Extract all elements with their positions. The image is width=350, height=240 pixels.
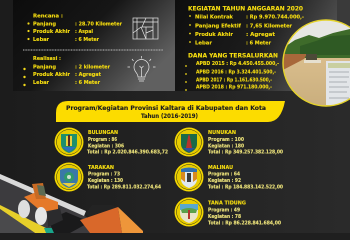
rencana text: : Aspal: [75, 29, 93, 35]
photo: road construction site: [280, 18, 350, 110]
rencana text: Panjang: [33, 22, 56, 28]
heading: kegiatan: KEGIATAN TAHUN ANGGARAN 2020: [188, 6, 303, 12]
logo: tana tidung: [174, 198, 204, 226]
dana details: APBD 2016 : Rp 3.324.401.500,-: [196, 70, 276, 76]
panel: kegiatan tahun anggaran 2020: [175, 0, 337, 91]
kegiatan details: : 6 Meter: [246, 40, 271, 46]
dana details: [185, 61, 279, 91]
road roller: [18, 183, 63, 227]
district: tana tidung: [174, 198, 281, 226]
dana details: APBD 2015 : Rp 4.450.455.000,-: [196, 61, 279, 67]
title banner: [56, 101, 285, 122]
kegiatan details: Nilai Kontrak: [195, 14, 233, 20]
kegiatan details: : Rp 9.970.744.000,-: [246, 14, 305, 20]
kegiatan details: Produk Akhir: [195, 32, 233, 38]
realisasi text: [23, 56, 110, 86]
realisasi text: : 6 Meter: [75, 80, 100, 86]
district: malinau: MALINAU: [208, 165, 233, 171]
logo: bulungan: [54, 128, 84, 156]
panel: rencana and realisasi: [13, 0, 175, 91]
district: bulungan: Kegiatan : 306: [88, 144, 124, 150]
dana details: APBD 2017 : Rp 1.161.630.500,-: [196, 78, 272, 84]
district: tana tidung: Total : Rp 86.228.841.684,00: [208, 220, 281, 226]
district: malinau: Program : 64: [208, 172, 240, 178]
realisasi text: : 2 kilometer: [75, 64, 110, 70]
road: [0, 174, 90, 233]
district: bulungan: Total : Rp 2.020.846.390.683,72: [87, 150, 168, 156]
kegiatan details: : 7,65 Kilometer: [246, 24, 292, 30]
district: tarakan: Program : 73: [88, 172, 120, 178]
title banner: Tahun (2016-2019): [141, 113, 198, 120]
district: tarakan: Total : Rp 289.811.032.274,64: [87, 184, 161, 190]
district: bulungan: BULUNGAN: [88, 130, 118, 136]
logo: nunukan: [174, 128, 204, 156]
district: nunukan: Kegiatan : 180: [208, 144, 244, 150]
kegiatan details: : Agregat: [246, 32, 275, 38]
realisasi text: Panjang: [33, 64, 56, 70]
kegiatan details: Panjang Efektif: [195, 24, 242, 30]
rencana text: : 6 Meter: [75, 37, 99, 43]
realisasi text: Produk Akhir: [33, 72, 70, 78]
icon: road map: [133, 18, 158, 39]
district: tana tidung: Program : 49: [208, 208, 240, 214]
district: bulungan: [54, 128, 168, 156]
district: nunukan: [174, 128, 283, 156]
district: bulungan: Program : 86: [88, 137, 117, 143]
district: malinau: [174, 162, 283, 192]
rencana text: Produk Akhir: [33, 29, 70, 35]
realisasi text: Realisasi :: [33, 56, 61, 62]
dump truck: [80, 205, 143, 233]
district: nunukan: Total : Rp 349.257.382.128,00: [208, 150, 283, 156]
district: nunukan: NUNUKAN: [208, 130, 236, 136]
logo: malinau: [174, 162, 204, 192]
illustration: road with roller and dump truck: [0, 174, 143, 233]
dana details: APBD 2018 : Rp 971.180.000,-: [196, 84, 272, 90]
district: tarakan: [54, 162, 161, 192]
icon: light bulb: [128, 56, 156, 81]
district: malinau: Total : Rp 184.883.142.522,00: [208, 184, 283, 190]
district: malinau: Kegiatan : 92: [208, 178, 241, 184]
rencana text: Rencana :: [33, 14, 63, 20]
realisasi text: Lebar: [33, 80, 49, 86]
district: tana tidung: TANA TIDUNG: [208, 200, 246, 206]
heading: dana yang tersalurkan: DANA YANG TERSALURKAN: [188, 54, 278, 60]
rencana text: : 28.70 Kilometer: [75, 22, 122, 28]
divider: [23, 49, 163, 51]
realisasi text: : Agregat: [75, 72, 101, 78]
district: tana tidung: Kegiatan : 78: [208, 214, 241, 220]
kegiatan details: [189, 14, 305, 46]
district: tarakan: TARAKAN: [88, 165, 114, 171]
district: nunukan: Program : 100: [208, 137, 244, 143]
rencana text: Lebar: [33, 37, 49, 43]
logo: tarakan: [54, 162, 84, 192]
rencana text: [27, 14, 122, 43]
district: tarakan: Kegiatan : 130: [88, 178, 123, 184]
kegiatan details: Lebar: [195, 40, 212, 46]
title banner: Program/Kegiatan Provinsi Kaltara di Kabupaten dan Kota: [66, 105, 266, 112]
